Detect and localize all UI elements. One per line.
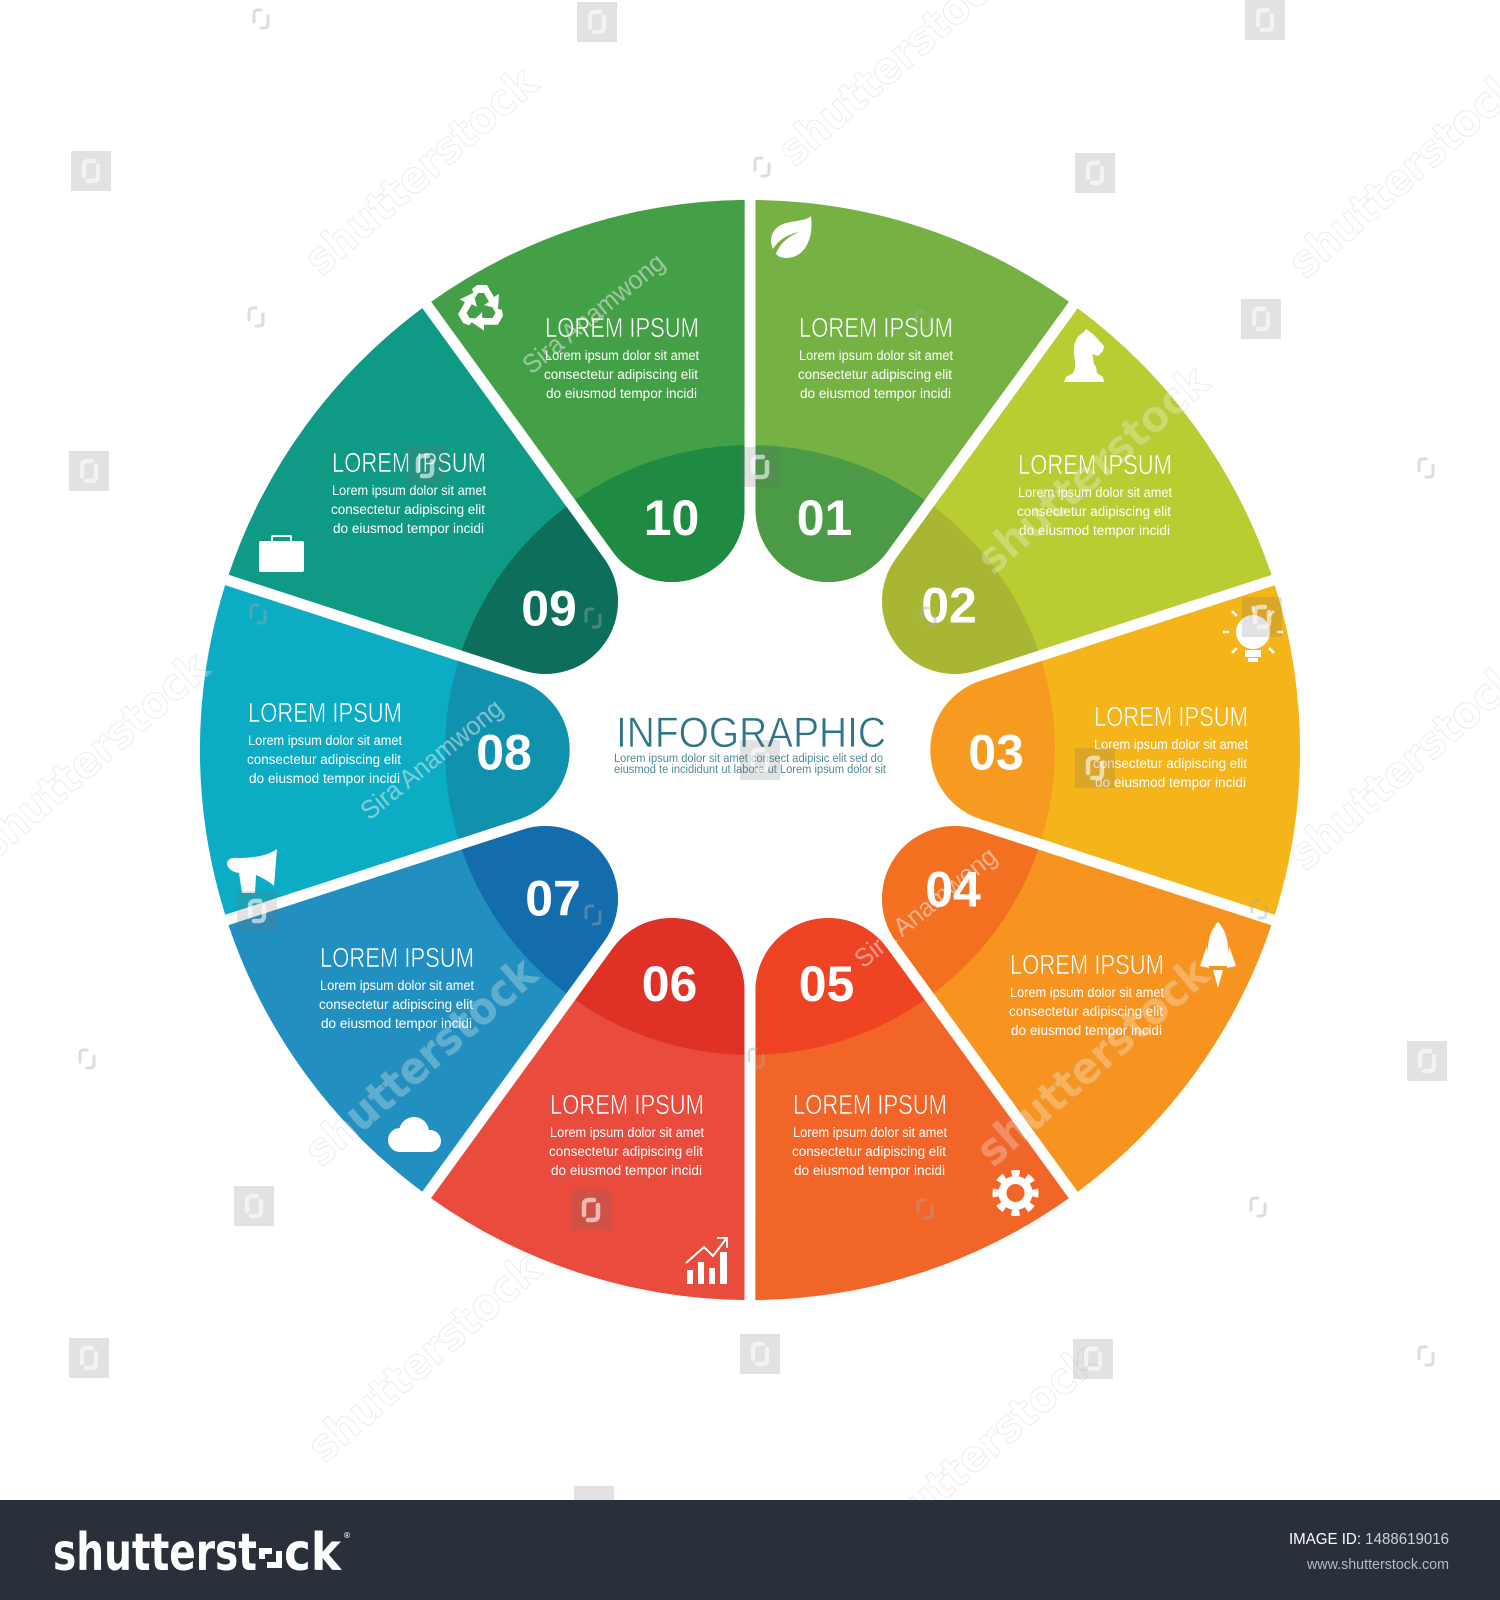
icon: megaphone [227,849,277,893]
text block 10: Lorem ipsum dolor sit amet [545,348,699,363]
text block 10: LOREM IPSUM [545,312,699,343]
icon: bar chart with arrow [686,1238,727,1284]
number 02: 02 [921,578,977,634]
text block 07: consectetur adipiscing elit [319,997,473,1012]
text block 04: do eiusmod tempor incidi [1011,1023,1162,1038]
footer bar [0,1500,1500,1600]
text block 04: Lorem ipsum dolor sit amet [1010,985,1164,1000]
text block 08: do eiusmod tempor incidi [249,771,400,786]
text block 04: consectetur adipiscing elit [1009,1004,1163,1019]
number 01: 01 [797,490,852,546]
text block 08: consectetur adipiscing elit [247,752,401,767]
text block 03: consectetur adipiscing elit [1093,756,1247,771]
panel: segment 03 [930,585,1300,915]
footer logo: shutterst [53,1523,257,1583]
number 04: 04 [925,862,981,918]
footer logo: ck [284,1523,342,1583]
watermark overlay: Sira Anamwong [354,693,508,826]
text block 02 [1017,449,1172,538]
number 07: 07 [525,870,581,926]
text block 09 [331,447,486,536]
panel: segment 08 [200,585,570,915]
text block 02: LOREM IPSUM [1018,449,1172,480]
footer image id [1289,1531,1449,1573]
text block 01 [798,312,953,401]
text block 08: LOREM IPSUM [248,697,402,728]
icon: cloud [388,1117,441,1152]
text block 07: Lorem ipsum dolor sit amet [320,978,474,993]
footer image id: IMAGE ID: 1488619016 [1289,1531,1449,1548]
watermark overlay: shutterstock [295,56,548,286]
text block 06: LOREM IPSUM [550,1089,704,1120]
number 05: 05 [799,956,854,1012]
text block 10: do eiusmod tempor incidi [546,386,697,401]
text block 05: consectetur adipiscing elit [792,1144,946,1159]
icon: leaf [771,216,812,258]
subtitle text [614,753,887,776]
text block 08 [247,697,402,786]
text block 01: consectetur adipiscing elit [798,367,952,382]
number 10: 10 [644,490,699,546]
text block 07 [319,942,474,1031]
text block 02: Lorem ipsum dolor sit amet [1018,485,1172,500]
text block 05: LOREM IPSUM [793,1089,947,1120]
text block 03: do eiusmod tempor incidi [1095,775,1246,790]
text block 09: consectetur adipiscing elit [331,502,485,517]
number 09: 09 [521,580,577,636]
center title [614,709,887,776]
panel: segment 09 [228,308,618,674]
text block 05: Lorem ipsum dolor sit amet [793,1125,947,1140]
text block 06 [549,1089,704,1178]
icon: light bulb [1223,606,1283,662]
text block 01: LOREM IPSUM [799,312,953,343]
watermark overlay: shutterstock [295,947,548,1177]
panel: segment 01 [756,200,1069,582]
footer image id: www.shutterstock.com [1306,1556,1449,1573]
text block 05: do eiusmod tempor incidi [794,1163,945,1178]
text block 07: LOREM IPSUM [320,942,474,973]
text block 10 [544,312,699,401]
text block 03: LOREM IPSUM [1094,701,1248,732]
text block 08: Lorem ipsum dolor sit amet [248,733,402,748]
text block 09: Lorem ipsum dolor sit amet [332,483,486,498]
icon: gear [996,1173,1036,1213]
panel: segment 04 [882,826,1272,1192]
watermark overlay: shutterstock [298,1243,551,1473]
number 03: 03 [968,724,1024,780]
icon: briefcase [259,536,304,572]
text block 09: do eiusmod tempor incidi [333,521,484,536]
icon: recycle [452,285,505,335]
watermark overlay: Sira Anamwong [848,841,1002,974]
subtitle text: Lorem ipsum dolor sit amet consect adipisic elit sed do [614,753,883,765]
text block 10: consectetur adipiscing elit [544,367,698,382]
panel: segment 06 [431,918,744,1300]
text block 04: LOREM IPSUM [1010,949,1164,980]
text block 04 [1009,949,1164,1038]
number 06: 06 [642,956,697,1012]
subtitle text: eiusmod te incididunt ut labore ut Lorem ipsum dolor sit [614,764,887,776]
watermark overlay: shutterstock [967,947,1220,1177]
text block 03 [1093,701,1248,790]
text block 01: do eiusmod tempor incidi [800,386,951,401]
text block 02: consectetur adipiscing elit [1017,504,1171,519]
text block 06: consectetur adipiscing elit [549,1144,703,1159]
heading: INFOGRAPHIC: INFOGRAPHIC [616,709,886,757]
panel: segment 02 [882,308,1272,674]
text block 09: LOREM IPSUM [332,447,486,478]
text block 02: do eiusmod tempor incidi [1019,523,1170,538]
watermark overlay: Sira Anamwong [516,247,670,380]
panel: segment 05 [755,918,1069,1300]
panel: segment 10 [431,200,745,582]
text block 05 [792,1089,947,1178]
text block 03: Lorem ipsum dolor sit amet [1094,737,1248,752]
number 08: 08 [476,724,532,780]
text block 07: do eiusmod tempor incidi [321,1016,472,1031]
footer logo: ® [343,1531,351,1540]
text block 01: Lorem ipsum dolor sit amet [799,348,953,363]
watermark overlay: shutterstock [855,1335,1108,1565]
icon: chess knight [1064,329,1104,382]
panel: segment 07 [228,826,618,1192]
watermark overlay: shutterstock [967,355,1220,585]
text block 06: do eiusmod tempor incidi [551,1163,702,1178]
icon: rocket [1200,922,1236,988]
text block 06: Lorem ipsum dolor sit amet [550,1125,704,1140]
